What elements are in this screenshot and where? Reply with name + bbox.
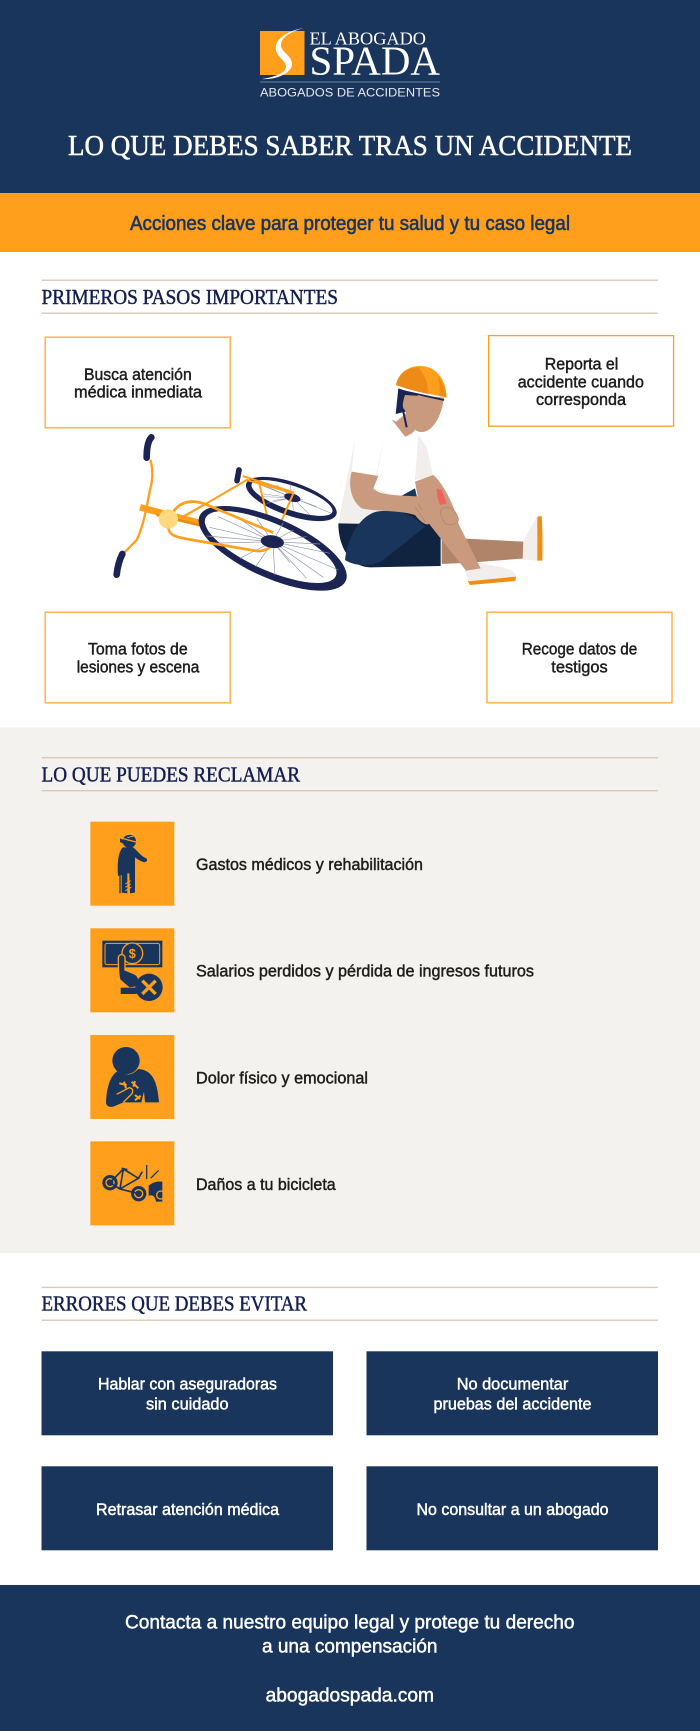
callout: reporta: corresponda: [536, 390, 627, 409]
icon: lost income: $: [129, 947, 136, 961]
icon: physical and emotional pain: [90, 1035, 174, 1119]
text: salarios perdidos: Salarios perdidos y pérdida de ingresos futuros: [196, 962, 534, 981]
title: LO QUE DEBES SABER TRAS UN ACCIDENTE: [68, 130, 632, 162]
callout: recoge datos: Recoge datos de: [522, 640, 637, 659]
card: no consultar: [366, 1466, 658, 1550]
subtitle band: Acciones clave para proteger tu salud y tu caso legal: [130, 213, 570, 235]
callout: toma fotos: lesiones y escena: [77, 657, 200, 676]
logo: ABOGADOS DE ACCIDENTES: [260, 87, 440, 100]
cyclist: [338, 366, 543, 585]
card: retrasar atencion: [42, 1466, 333, 1550]
card: no documentar: No documentar: [457, 1374, 569, 1393]
callout: toma fotos: Toma fotos de: [88, 640, 188, 659]
card: no documentar: pruebas del accidente: [434, 1394, 592, 1413]
card: hablar con aseguradoras: sin cuidado: [146, 1394, 229, 1413]
logo: EL ABOGADO: [310, 28, 426, 48]
text: dolor fisico: Dolor físico y emocional: [196, 1068, 368, 1087]
subtitle band: [0, 193, 700, 252]
callout: reporta: [489, 336, 674, 426]
callout: busca atencion: [45, 337, 230, 428]
card: no consultar: No consultar a un abogado: [416, 1500, 608, 1519]
text: danos a tu bicicleta: Daños a tu bicicleta: [196, 1175, 336, 1194]
logo: SPADA: [310, 38, 440, 84]
card: hablar con aseguradoras: [42, 1351, 333, 1435]
callout: busca atencion: Busca atención: [84, 365, 192, 384]
icon: damaged bicycle: [90, 1141, 174, 1225]
card: retrasar atencion: Retrasar atención médica: [96, 1500, 280, 1519]
logo: [260, 28, 440, 100]
illustration: fallen cyclist and bicycle: [117, 366, 543, 608]
section heading: errores: ERRORES QUE DEBES EVITAR: [42, 1292, 307, 1316]
footer: Contacta a nuestro equipo legal y protege tu derecho: [125, 1611, 574, 1633]
callout: toma fotos: [45, 612, 230, 703]
footer: abogadospada.com: [266, 1685, 434, 1707]
panel: lo que puedes reclamar: [0, 727, 700, 1253]
footer: a una compensación: [262, 1636, 438, 1658]
card: no documentar: [366, 1351, 658, 1435]
callout: reporta: accidente cuando: [518, 372, 644, 391]
footer: [0, 1585, 700, 1731]
panel: header: [0, 0, 700, 193]
callout: reporta: Reporta el: [545, 354, 618, 373]
section heading: primeros pasos: PRIMEROS PASOS IMPORTANTES: [42, 285, 338, 309]
callout: recoge datos: testigos: [551, 657, 608, 676]
callout: recoge datos: [487, 612, 672, 703]
callout: busca atencion: médica inmediata: [74, 383, 203, 402]
text: gastos medicos: Gastos médicos y rehabilitación: [196, 855, 423, 874]
bicycle: [117, 437, 358, 608]
card: hablar con aseguradoras: Hablar con aseguradoras: [98, 1374, 277, 1393]
icon: lost income: [90, 928, 174, 1012]
icon: injured person: [90, 822, 174, 906]
section heading: reclamar: LO QUE PUEDES RECLAMAR: [42, 763, 300, 787]
